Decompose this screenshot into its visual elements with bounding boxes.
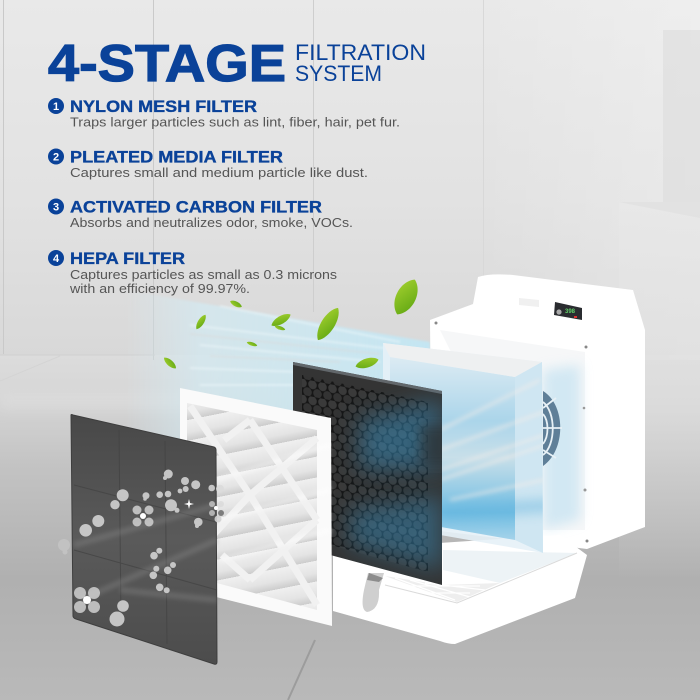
stage 2 text: Captures small and medium particle like dust. [70, 165, 368, 180]
activated carbon filter (stage 3) [293, 362, 450, 585]
latch [363, 573, 384, 612]
blue glow on unit [543, 365, 580, 530]
air purifier unit [430, 274, 645, 549]
stage 4 text: 4 [53, 253, 60, 265]
title [48, 35, 426, 93]
stage 3 text: 3 [53, 202, 59, 214]
title: 4-STAGE [48, 35, 286, 93]
leaves [162, 275, 424, 371]
stage 3 text [48, 198, 353, 230]
stage 1 text: NYLON MESH FILTER [70, 98, 257, 116]
stage 1 text: 1 [53, 101, 59, 113]
title: FILTRATION [295, 40, 426, 65]
nylon mesh filter (stage 1) [71, 414, 217, 664]
dust particles [58, 470, 224, 626]
airflow stream behind filters [125, 290, 430, 440]
sparkle particles [74, 499, 224, 613]
stage 2 text [48, 148, 368, 180]
stage 2 text: PLEATED MEDIA FILTER [70, 148, 283, 166]
stage 4 text: with an efficiency of 99.97%. [69, 281, 250, 296]
stage 1 text [48, 98, 400, 130]
stage 3 text: ACTIVATED CARBON FILTER [70, 198, 322, 216]
control panel display [554, 302, 582, 320]
stage 4 text: Captures particles as small as 0.3 microns [70, 267, 338, 282]
stage 4 text [48, 250, 338, 296]
pleated media filter (stage 2) [180, 388, 332, 626]
title: SYSTEM [295, 61, 382, 86]
HEPA filter (stage 4) [383, 343, 543, 553]
base tray [333, 535, 587, 644]
lattice [190, 406, 317, 605]
fan grille [543, 391, 562, 466]
stage 3 text: Absorbs and neutralizes odor, smoke, VOCs. [70, 215, 353, 230]
control panel display: 398 [565, 309, 576, 315]
stage 4 text: HEPA FILTER [70, 250, 185, 268]
stage 2 text: 2 [53, 152, 59, 164]
stage 1 text: Traps larger particles such as lint, fiber, hair, pet fur. [70, 114, 400, 130]
